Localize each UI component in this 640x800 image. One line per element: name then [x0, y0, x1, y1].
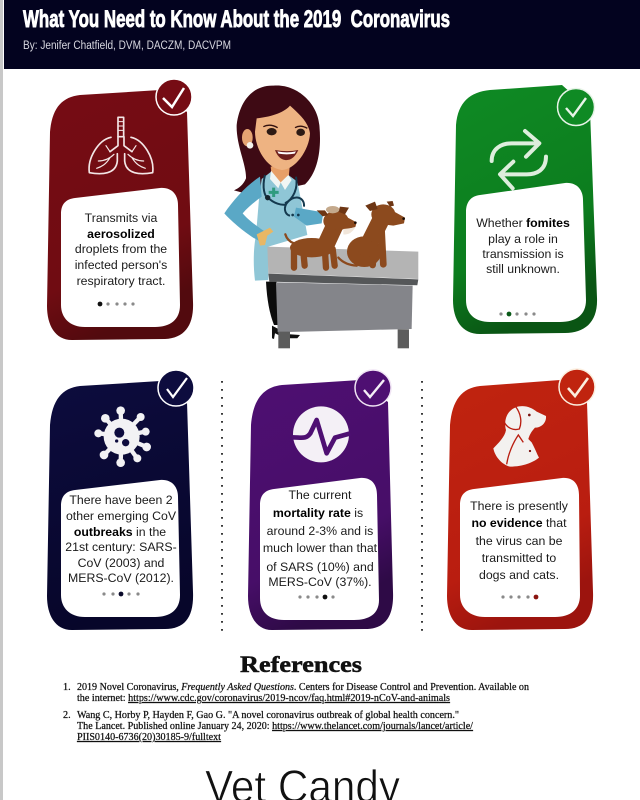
reference 2: PIIS0140-6736(20)30185-9/fulltext: [77, 732, 221, 743]
icon: check badge: [559, 369, 595, 405]
body text: in the: [133, 525, 166, 539]
reference 2: The Lancet. Published online January 24, 2020: https://www.thelancet.com/journals/lancet/article/: [77, 721, 473, 732]
hand on hip: [257, 228, 273, 246]
icon: pulse: [292, 406, 350, 462]
pagination dots: [102, 592, 140, 596]
icon: check badge: [158, 370, 194, 406]
body text: MERS-CoV (2012).: [68, 571, 174, 585]
body text: infected person's: [75, 258, 167, 272]
text panel: [61, 188, 180, 327]
coat arm right: [294, 208, 323, 226]
body text: is: [351, 506, 363, 520]
references heading: References: [240, 652, 362, 677]
body text: CoV (2003) and: [78, 556, 165, 570]
hair back: [234, 85, 320, 196]
body text: much lower than that: [263, 541, 378, 555]
body text: The current: [289, 488, 352, 502]
body text: aerosolized: [87, 227, 155, 241]
text panel: [466, 183, 586, 322]
stethoscope: [264, 175, 304, 216]
text panel: [460, 478, 580, 617]
reference 1: the internet: https://www.cdc.gov/coronavirus/2019-ncov/faq.html#2019-nCoV-and-animals: [77, 693, 450, 704]
icon: lungs: [89, 117, 153, 174]
ear and earring: [242, 129, 253, 146]
reference 2: [63, 710, 473, 743]
reference 1: [63, 682, 529, 704]
dog one: [285, 207, 357, 268]
reference 2: Wang C, Horby P, Hayden F, Gao G. "A novel coronavirus outbreak of global health concern.": [77, 710, 459, 721]
eyes: [267, 128, 277, 135]
body text: 21st century: SARS-: [65, 540, 177, 554]
panel: fomites: [453, 85, 597, 334]
reference 2: 2.: [63, 710, 71, 721]
pagination dots: [499, 312, 536, 316]
body text: mortality rate: [273, 506, 351, 520]
dog two: [338, 201, 405, 267]
page edge: [0, 0, 3, 800]
illustration: vet with two dogs: [224, 85, 418, 348]
divider: right dotted line: [421, 381, 423, 632]
coat arm left: [224, 177, 265, 241]
text panel: [61, 480, 180, 617]
body text: MERS-CoV (37%).: [268, 575, 372, 589]
pagination dots: [298, 595, 335, 599]
exam table: [267, 247, 418, 348]
icon: check badge: [156, 79, 192, 115]
body text: Whether: [476, 216, 526, 230]
panel: mortality rate: [248, 370, 393, 630]
title: What You Need to Know About the 2019 Coronavirus: [23, 6, 450, 33]
reference 1: 1.: [63, 682, 71, 693]
pagination dots: [98, 302, 135, 306]
face: [255, 106, 310, 170]
hand on dog: [326, 206, 339, 213]
body text: outbreaks: [74, 525, 133, 539]
body text: play a role in: [488, 232, 558, 246]
body text: transmitted to: [482, 551, 556, 565]
body text: There is presently: [470, 499, 569, 513]
panel: outbreaks: [47, 370, 194, 630]
panel: no evidence in pets: [447, 369, 595, 630]
header banner: [4, 0, 640, 69]
vet legs: [266, 282, 278, 325]
icon: virus: [94, 406, 151, 467]
pagination dots: [501, 595, 538, 599]
neck and collar: [271, 163, 290, 183]
mouth: [275, 150, 298, 160]
body text: dogs and cats.: [479, 568, 559, 582]
body text: There have been 2: [69, 493, 173, 507]
icon: dog and cat: [493, 406, 546, 467]
body text: Transmits via: [85, 211, 157, 225]
body text: fomites: [526, 216, 570, 230]
coat: [254, 170, 307, 281]
body text: still unknown.: [486, 262, 560, 276]
icon: check badge: [355, 370, 391, 406]
body text: the virus can be: [476, 534, 563, 548]
body text: that: [543, 516, 567, 530]
body text: of SARS (10%) and: [266, 560, 374, 574]
byline: By: Jenifer Chatfield, DVM, DACZM, DACVPM: [23, 40, 231, 52]
vet shoe: [272, 326, 300, 339]
text panel: [260, 478, 379, 620]
body text: around 2-3% and is: [267, 524, 373, 538]
body text: respiratory tract.: [77, 274, 165, 288]
body text: droplets from the: [75, 242, 167, 256]
body text: transmission is: [482, 247, 564, 261]
cross badge: [269, 188, 279, 197]
icon: exchange arrows: [492, 131, 546, 188]
panel: aerosolized droplets: [47, 79, 193, 340]
body text: no evidence: [471, 516, 543, 530]
icon: check badge: [558, 88, 594, 126]
reference 1: 2019 Novel Coronavirus, Frequently Asked Questions. Centers for Disease Control and Prevention. Available on: [77, 682, 529, 693]
body text: other emerging CoV: [66, 509, 177, 523]
divider: left dotted line: [221, 381, 223, 632]
